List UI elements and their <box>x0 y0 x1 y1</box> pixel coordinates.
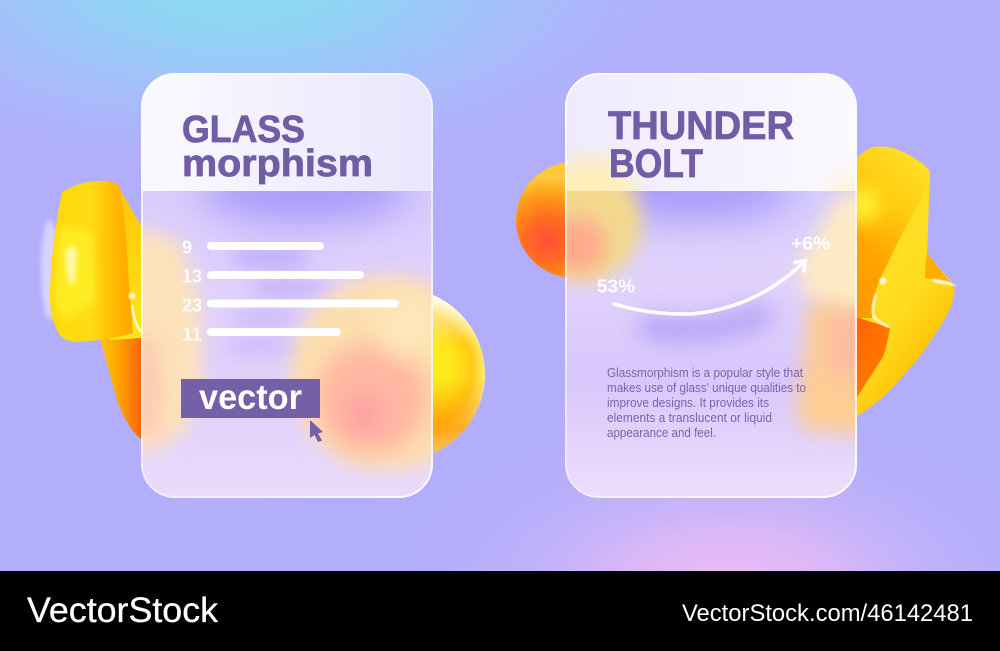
footer bar <box>0 571 1000 651</box>
list: bars with numbers <box>182 238 399 344</box>
heading: GLASS morphism: GLASS <box>182 109 305 151</box>
icon: cursor arrow <box>310 420 323 442</box>
card border <box>566 74 856 497</box>
heading: THUNDER BOLT: THUNDER <box>608 104 794 148</box>
card header glass <box>141 73 433 191</box>
chart: growth arrow <box>597 234 830 314</box>
text block: description: elements a translucent or liquid <box>607 411 772 425</box>
card body glass <box>141 191 433 498</box>
frosted sphere blur <box>565 191 654 294</box>
heading: GLASS morphism <box>182 109 373 185</box>
panel: glass card right <box>565 73 857 498</box>
footer url: VectorStock.com/46142481 <box>682 600 973 627</box>
list: bars with numbers: 23 <box>182 296 202 316</box>
heading: GLASS morphism: morphism <box>182 143 373 185</box>
icon: orange sphere behind right card <box>516 162 632 278</box>
frosted bolt blur <box>792 191 857 312</box>
label: 53%: 53% <box>597 276 635 296</box>
label: +6%: +6% <box>791 234 830 254</box>
icon: left lightning bolt <box>41 181 141 439</box>
text block: description: improve designs. It provides its <box>607 396 769 410</box>
text block: description <box>607 366 806 440</box>
text block: description: makes use of glass' unique qualities to <box>607 381 806 395</box>
list: bars with numbers: 11 <box>182 324 202 344</box>
button: vector: vector <box>199 378 302 417</box>
card border <box>142 74 432 497</box>
list: bars with numbers: 9 <box>182 238 192 258</box>
frosted sphere blur <box>280 266 433 480</box>
text block: description: Glassmorphism is a popular style that <box>607 366 803 380</box>
icon: yellow sphere behind left card <box>313 288 485 460</box>
panel: glass card left <box>141 73 433 498</box>
text block: description: appearance and feel. <box>607 426 716 440</box>
footer logo: VectorStock <box>27 591 219 630</box>
list: bars with numbers: 13 <box>182 266 202 286</box>
bar shadows <box>222 251 327 352</box>
card header glass <box>565 73 857 191</box>
card body glass <box>565 191 857 498</box>
heading: THUNDER BOLT: BOLT <box>609 142 703 186</box>
frosted bolt blur <box>141 220 212 461</box>
arrow shadow <box>640 312 770 330</box>
icon: right lightning bolt <box>844 147 957 421</box>
arrow curve <box>614 260 806 314</box>
heading: THUNDER BOLT <box>608 104 794 186</box>
